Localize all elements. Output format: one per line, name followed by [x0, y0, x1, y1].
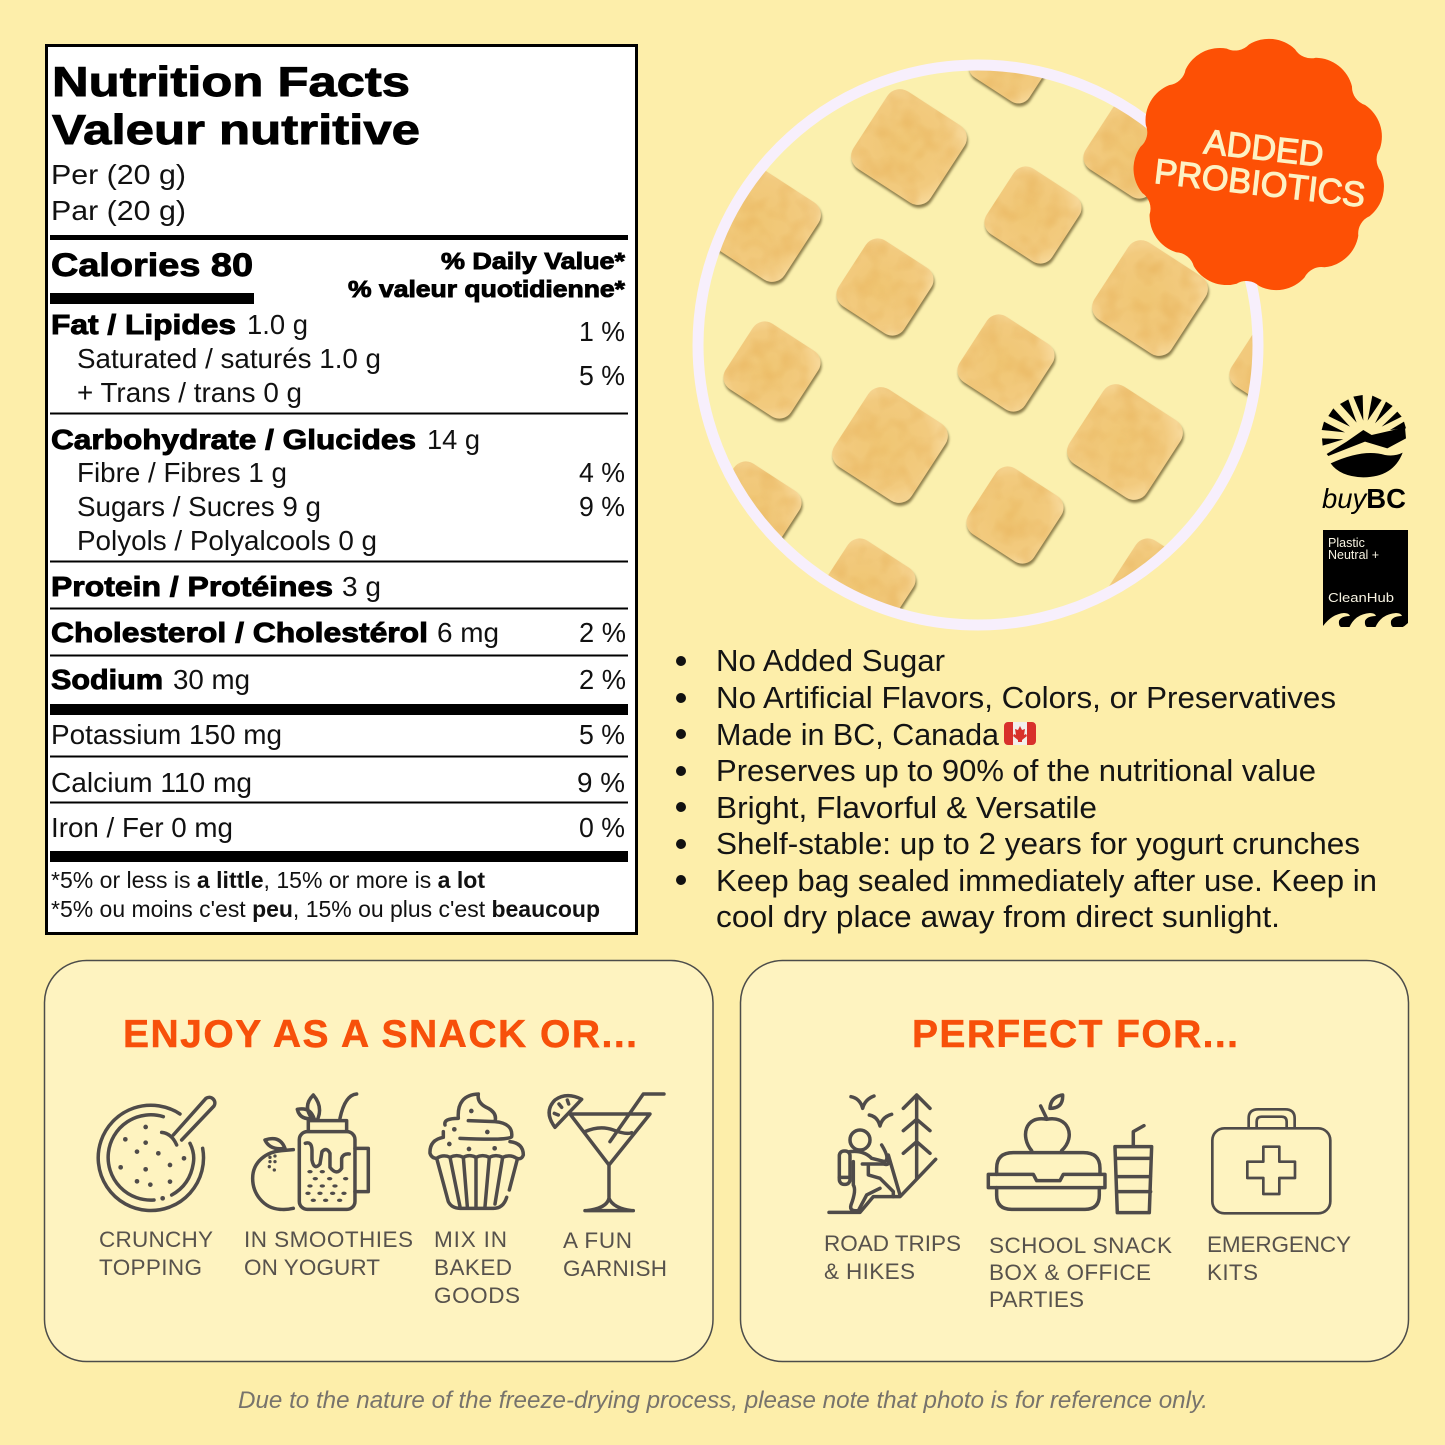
- label: crunchy topping: TOPPING: [99, 1255, 202, 1280]
- label: mix in baked goods: BAKED: [434, 1255, 512, 1280]
- row: calcium: [51, 767, 625, 798]
- logo: plastic neutral cleanhub: [1323, 530, 1408, 628]
- label: in smoothies on yogurt: ON YOGURT: [244, 1255, 380, 1280]
- footnote: [51, 867, 600, 922]
- row: carbohydrate: 14 g: [427, 424, 480, 455]
- label: emergency kits: KITS: [1207, 1260, 1258, 1285]
- icon: hiker: [829, 1095, 936, 1212]
- row: carbohydrate: 4 %: [579, 457, 625, 488]
- calories: [50, 247, 254, 304]
- benefits list: Made in BC, Canada: [716, 717, 1000, 752]
- row: carbohydrate: Polyols / Polyalcools 0 g: [77, 525, 377, 556]
- badge: added probiotics: [1134, 39, 1384, 290]
- row: carbohydrate: Carbohydrate / Glucides: [51, 424, 416, 455]
- logo: plastic neutral cleanhub: Neutral +: [1328, 548, 1379, 562]
- row: fat: Saturated / saturés 1.0 g: [77, 343, 381, 374]
- row: fat: 5 %: [579, 360, 625, 391]
- label: a fun garnish: [563, 1228, 667, 1281]
- photo: freeze-dried yogurt crunches in circle: [698, 12, 1332, 641]
- panel: perfect for: [740, 960, 1408, 1362]
- benefits list: cool dry place away from direct sunlight.: [716, 899, 1280, 934]
- serving size: Par (20 g): [51, 195, 186, 226]
- benefits list: No Artificial Flavors, Colors, or Preservatives: [716, 680, 1336, 715]
- logo: buyBC: buyBC: [1322, 483, 1406, 514]
- label: in smoothies on yogurt: [244, 1227, 413, 1280]
- icon: lunch box, apple and cup: [988, 1095, 1152, 1213]
- row: cholesterol: Cholesterol / Cholestérol: [51, 617, 428, 648]
- benefits list: Keep bag sealed immediately after use. Keep in: [716, 863, 1377, 898]
- row: carbohydrate: 9 %: [579, 491, 625, 522]
- logo: plastic neutral cleanhub: Plastic: [1328, 536, 1365, 550]
- row: cholesterol: 2 %: [579, 617, 626, 648]
- label: road trips and hikes: [824, 1231, 961, 1284]
- row: fat: + Trans / trans 0 g: [77, 377, 302, 408]
- row: potassium: [51, 719, 625, 750]
- row: iron: 0 %: [579, 812, 625, 843]
- icon: canadian flag: [1004, 722, 1036, 745]
- label: crunchy topping: CRUNCHY: [99, 1227, 213, 1252]
- panel: nutrition facts: [46, 46, 636, 934]
- label: emergency kits: EMERGENCY: [1207, 1232, 1351, 1257]
- label: a fun garnish: GARNISH: [563, 1256, 667, 1281]
- row: cholesterol: [51, 617, 626, 648]
- icon: cupcake: [430, 1094, 523, 1208]
- row: iron: [51, 812, 625, 843]
- label: school snack box and office parties: PARTIES: [989, 1287, 1084, 1312]
- row: fat: [51, 309, 625, 408]
- label: crunchy topping: [99, 1227, 213, 1280]
- footnote: *5% or less is a little, 15% or more is a lot: [51, 867, 485, 893]
- benefits list: No Added Sugar: [716, 643, 945, 678]
- footer disclaimer: Due to the nature of the freeze-drying process, please note that photo is for reference only.: [238, 1387, 1208, 1414]
- row: sodium: 30 mg: [173, 664, 250, 695]
- label: emergency kits: [1207, 1232, 1351, 1285]
- label: school snack box and office parties: SCHOOL SNACK: [989, 1233, 1172, 1258]
- row: sodium: Sodium: [51, 664, 163, 695]
- benefits list: Preserves up to 90% of the nutritional value: [716, 753, 1316, 788]
- title: Valeur nutritive: [52, 106, 420, 153]
- benefits list: [676, 643, 1377, 934]
- row: protein: Protein / Protéines: [51, 571, 333, 602]
- calories: Calories 80: [51, 247, 253, 283]
- title: Nutrition Facts: [52, 58, 410, 105]
- heading: enjoy as a snack or: ENJOY AS A SNACK OR...: [123, 1013, 637, 1056]
- daily value header: % Daily Value*: [441, 248, 625, 274]
- benefits list: Shelf-stable: up to 2 years for yogurt crunches: [716, 826, 1360, 861]
- icon: first aid kit: [1212, 1109, 1330, 1213]
- row: carbohydrate: Fibre / Fibres 1 g: [77, 457, 287, 488]
- icon: martini: [549, 1094, 664, 1211]
- label: mix in baked goods: GOODS: [434, 1283, 520, 1308]
- row: protein: 3 g: [342, 571, 381, 602]
- icon: bowl: [98, 1097, 215, 1211]
- logo: buyBC: [1322, 395, 1406, 514]
- label: road trips and hikes: ROAD TRIPS: [824, 1231, 961, 1256]
- row: calcium: Calcium 110 mg: [51, 767, 252, 798]
- serving size: [51, 159, 186, 226]
- label: school snack box and office parties: [989, 1233, 1172, 1312]
- row: fat: 1 %: [579, 316, 625, 347]
- heading: perfect for: PERFECT FOR...: [912, 1013, 1238, 1056]
- row: iron: Iron / Fer 0 mg: [51, 812, 233, 843]
- row: fat: Fat / Lipides: [51, 309, 236, 340]
- serving size: Per (20 g): [51, 159, 186, 190]
- row: potassium: Potassium 150 mg: [51, 719, 282, 750]
- logo: plastic neutral cleanhub: CleanHub: [1328, 590, 1394, 605]
- row: carbohydrate: Sugars / Sucres 9 g: [77, 491, 321, 522]
- daily value header: [348, 248, 625, 302]
- panel: enjoy as a snack: [44, 960, 713, 1362]
- title: [52, 58, 420, 153]
- label: mix in baked goods: [434, 1227, 520, 1308]
- row: calcium: 9 %: [577, 767, 625, 798]
- label: a fun garnish: A FUN: [563, 1228, 632, 1253]
- row: fat: 1.0 g: [247, 309, 308, 340]
- row: sodium: [51, 664, 626, 695]
- row: potassium: 5 %: [579, 719, 625, 750]
- row: carbohydrate: [51, 424, 625, 556]
- badge: added probiotics: PROBIOTICS: [1152, 152, 1367, 215]
- benefits list: Bright, Flavorful & Versatile: [716, 790, 1097, 825]
- label: school snack box and office parties: BOX & OFFICE: [989, 1260, 1151, 1285]
- footnote: *5% ou moins c'est peu, 15% ou plus c'est beaucoup: [51, 896, 600, 922]
- badge: added probiotics: ADDED: [1202, 122, 1326, 175]
- label: in smoothies on yogurt: IN SMOOTHIES: [244, 1227, 413, 1252]
- label: road trips and hikes: & HIKES: [824, 1259, 915, 1284]
- label: mix in baked goods: MIX IN: [434, 1227, 507, 1252]
- row: sodium: 2 %: [579, 664, 626, 695]
- icon: smoothie jar and orange: [253, 1094, 368, 1210]
- daily value header: % valeur quotidienne*: [348, 276, 625, 302]
- row: cholesterol: 6 mg: [437, 617, 499, 648]
